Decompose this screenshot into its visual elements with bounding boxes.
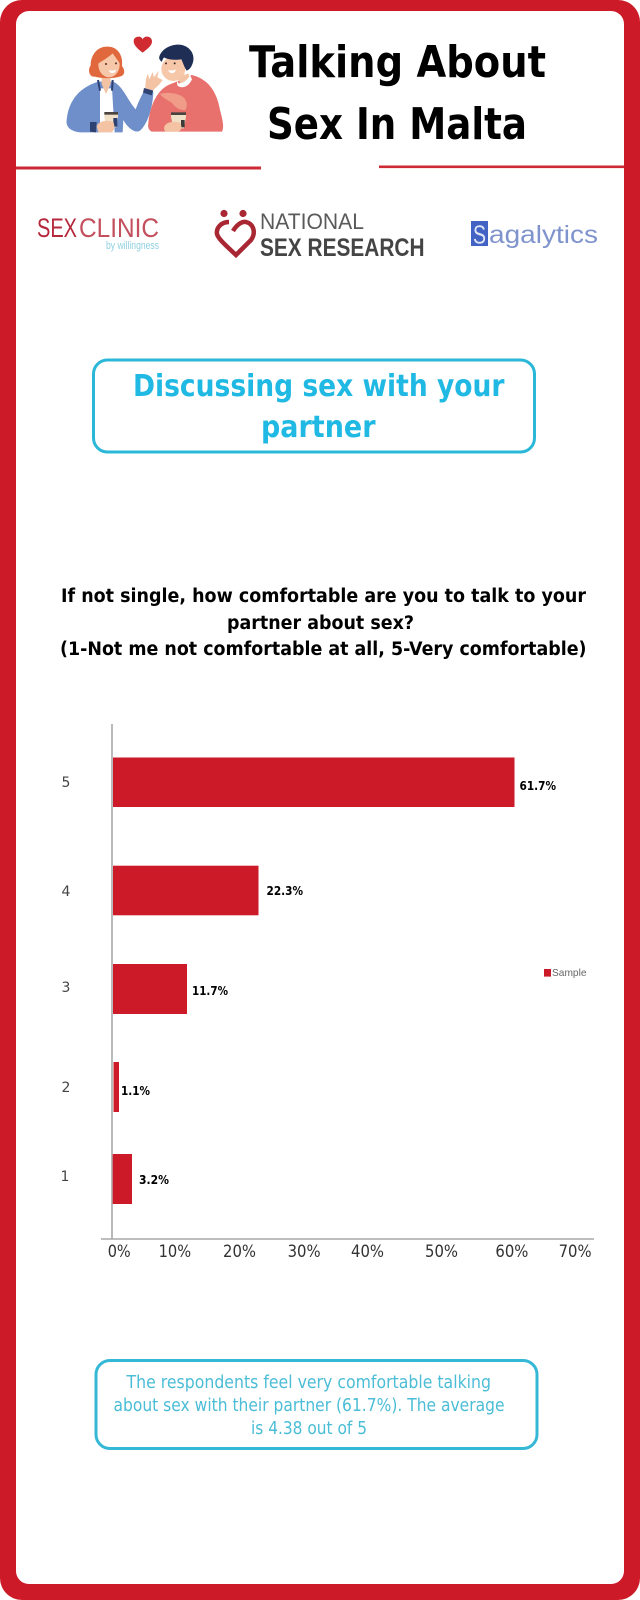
x axis labels: 40% bbox=[351, 1242, 384, 1262]
x axis labels: 50% bbox=[425, 1242, 458, 1262]
x axis labels: 60% bbox=[495, 1242, 528, 1262]
section heading box bbox=[94, 360, 534, 452]
illustration: couple talking bbox=[66, 37, 223, 132]
x axis labels: 30% bbox=[288, 1242, 321, 1262]
x axis labels bbox=[108, 1242, 592, 1262]
logo: Sex Clinic: SEX bbox=[37, 213, 77, 243]
legend: Sample bbox=[552, 967, 587, 979]
woman bbox=[66, 47, 163, 132]
category labels: 2 bbox=[62, 1080, 70, 1096]
value labels: 1.1% bbox=[121, 1084, 150, 1098]
callout: summary: is 4.38 out of 5 bbox=[251, 1419, 367, 1439]
logo: Sex Clinic: by willingness bbox=[106, 240, 159, 252]
category labels: 4 bbox=[62, 884, 71, 900]
value labels: 22.3% bbox=[266, 884, 303, 898]
x axis labels: 10% bbox=[159, 1242, 191, 1262]
logo: Sagalytics: S bbox=[473, 220, 486, 250]
callout: summary bbox=[96, 1360, 537, 1448]
question text: If not single, how comfortable are you to talk to your bbox=[61, 586, 587, 607]
logo: Sex Clinic bbox=[37, 213, 159, 252]
bar chart bbox=[61, 724, 594, 1262]
category labels: 3 bbox=[62, 980, 70, 996]
callout: summary: about sex with their partner (61.7%). The average bbox=[114, 1396, 504, 1416]
x axis labels: 0% bbox=[108, 1242, 131, 1262]
man bbox=[148, 45, 223, 132]
logo: Sex Clinic: CLINIC bbox=[79, 213, 159, 243]
header divider bbox=[16, 166, 624, 170]
x axis labels: 70% bbox=[559, 1242, 592, 1262]
logo: National Sex Research bbox=[217, 209, 424, 262]
x axis labels: 20% bbox=[223, 1242, 256, 1262]
value labels: 61.7% bbox=[520, 779, 556, 793]
logo: National Sex Research: SEX RESEARCH bbox=[260, 234, 424, 262]
logo: Sagalytics: agalytics bbox=[489, 221, 598, 249]
title bbox=[249, 37, 546, 150]
section heading box: partner bbox=[261, 410, 376, 445]
title: Talking About bbox=[249, 37, 546, 88]
question text bbox=[60, 586, 587, 660]
question text: (1-Not me not comfortable at all, 5-Very comfortable) bbox=[60, 639, 586, 660]
value labels: 11.7% bbox=[192, 984, 228, 998]
icon: heart with two dots bbox=[217, 210, 254, 255]
bars bbox=[113, 758, 514, 1204]
logo: National Sex Research: NATIONAL bbox=[260, 209, 364, 234]
category labels: 1 bbox=[61, 1169, 69, 1185]
section heading box: Discussing sex with your bbox=[133, 369, 505, 404]
question text: partner about sex? bbox=[227, 613, 414, 634]
callout: summary: The respondents feel very comfortable talking bbox=[126, 1373, 491, 1393]
title: Sex In Malta bbox=[267, 99, 527, 150]
value labels: 3.2% bbox=[139, 1173, 169, 1187]
value labels bbox=[121, 779, 556, 1187]
icon: heart bbox=[134, 37, 152, 53]
category labels: 5 bbox=[62, 775, 70, 791]
axes bbox=[101, 724, 594, 1239]
category labels bbox=[61, 775, 71, 1185]
